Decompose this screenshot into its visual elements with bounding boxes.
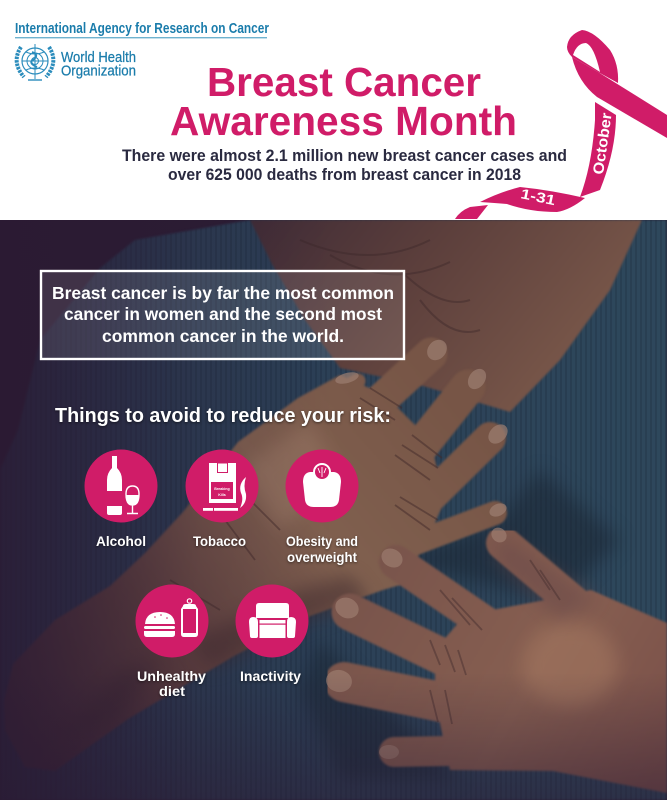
logo: World Health Organization: Organization [61,64,136,80]
subtitle statistics [122,147,567,184]
icon: tobacco: Kills [218,493,226,497]
left vignette [0,235,274,799]
label: alcohol: Alcohol [96,533,146,549]
lower right hand [344,543,667,793]
callout box: cancer in women and the second most [64,304,382,324]
icon: bathroom scale [286,450,358,522]
callout box: common cancer in the world. [102,326,344,346]
skin shading on upper hand [60,388,442,740]
ribbon right tail [572,57,667,138]
icon: armchair [236,584,308,658]
fingernails upper hand [334,336,511,519]
icon: alcohol [84,450,158,522]
ribbon descending strand with month label: October [590,112,616,176]
title: Awareness Month [170,98,517,144]
header background [0,0,667,220]
ribbon descending strand with month label [580,102,616,197]
callout box: Breast cancer is by far the most common [52,283,394,303]
WHO emblem [17,44,53,80]
shadow under the hands [300,470,620,780]
icon: unhealthy diet [136,584,208,658]
icon: tobacco: Breaking [214,487,230,491]
upper hand and forearm [4,354,495,771]
section heading: Things to avoid to reduce your risk: [55,405,391,427]
pink ribbon [455,30,667,219]
subtitle statistics: over 625 000 deaths from breast cancer in 2018 [168,166,521,184]
label: obesity and overweight: Obesity and [286,534,358,549]
label: obesity and overweight [286,534,358,565]
callout box [41,271,404,359]
title [170,59,517,144]
bottom vignette [112,692,667,800]
label: unhealthy diet [137,668,206,699]
neck [250,220,642,412]
ribbon lower fold with date [455,185,585,219]
sweater [0,220,667,800]
photo: woman's hands on chest [0,220,667,800]
ribbon loop [567,30,618,83]
logo: International Agency for Research on Cancer: International Agency for Research on Cancer [15,21,269,37]
fingernails lower hand [324,524,510,759]
logo: World Health Organization: World Health [61,50,136,66]
label: inactivity: Inactivity [240,668,301,684]
title: Breast Cancer [207,59,481,105]
label: unhealthy diet: diet [159,683,185,699]
label: tobacco: Tobacco [193,533,246,549]
ribbon lower fold with date: 1-31 [519,185,557,208]
logo: World Health Organization [17,44,136,80]
subtitle statistics: There were almost 2.1 million new breast cancer cases and [122,147,567,165]
icon: tobacco [186,450,258,522]
skin shading on lower hand [430,535,618,724]
label: obesity and overweight: overweight [287,550,357,565]
label: unhealthy diet: Unhealthy [137,668,206,684]
